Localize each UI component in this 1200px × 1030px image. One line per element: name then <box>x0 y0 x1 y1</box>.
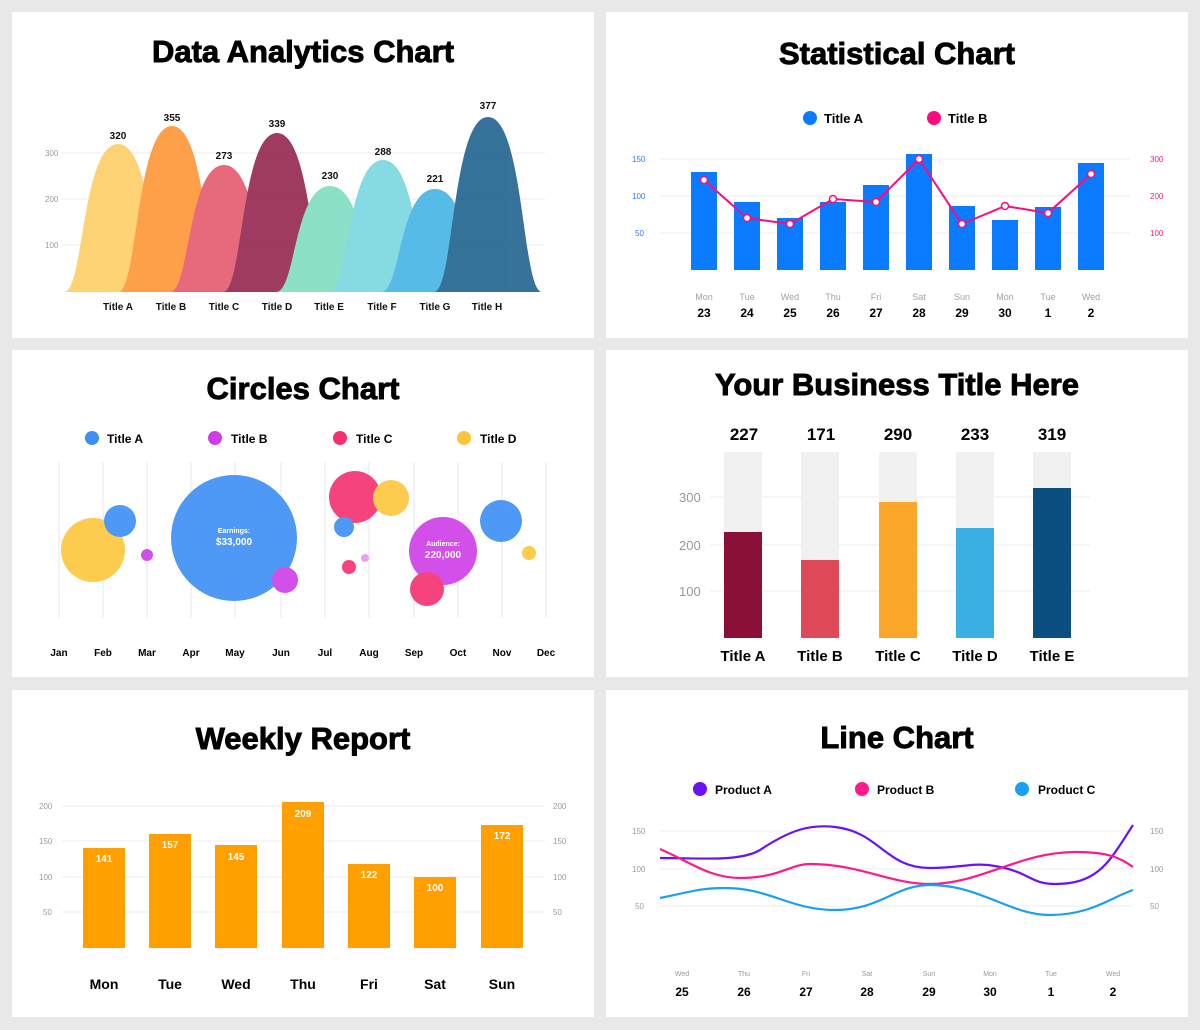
panel: weekly report: Sun <box>489 976 515 992</box>
panel: circles chart: Jan <box>50 648 68 659</box>
bar chart <box>83 802 523 948</box>
panel: weekly report: Tue <box>158 976 182 992</box>
panel: statistical chart: 2 <box>1088 306 1095 320</box>
panel: line chart: Mon <box>983 971 997 978</box>
legend <box>85 431 517 446</box>
legend: Product B <box>877 783 935 797</box>
legend: Product A <box>715 783 772 797</box>
panel: statistical chart: Fri <box>871 292 881 302</box>
panel: weekly report: 200 <box>39 802 53 811</box>
panel: line chart: 27 <box>799 985 813 999</box>
panel: line chart: Tue <box>1045 971 1057 978</box>
panel: circles chart: Mar <box>138 648 156 659</box>
panel: data analytics chart: Title D <box>262 302 292 313</box>
panel: statistical chart: Sat <box>912 292 926 302</box>
panel: statistical chart <box>606 12 1188 338</box>
panel: data analytics chart: 355 <box>164 113 181 124</box>
panel: weekly report: 100 <box>553 873 567 882</box>
panel: weekly report: Sat <box>424 976 446 992</box>
panel: weekly report: 122 <box>361 870 378 881</box>
panel: business bars: 300 <box>679 490 701 505</box>
legend: Title B <box>231 432 268 446</box>
panel: statistical chart: 29 <box>955 306 969 320</box>
panel: line chart <box>606 690 1188 1017</box>
title: weekly: Weekly Report <box>196 721 410 756</box>
lines <box>660 825 1133 915</box>
panel: data analytics chart: 377 <box>480 101 497 112</box>
title: business: Your Business Title Here <box>715 367 1079 402</box>
panel: statistical chart: Mon <box>996 292 1014 302</box>
panel: line chart: Fri <box>802 971 811 978</box>
panel: line chart: 29 <box>922 985 936 999</box>
panel: data analytics chart: 200 <box>45 195 59 204</box>
panel: circles chart: Apr <box>182 648 200 659</box>
panel: statistical chart: 150 <box>632 155 646 164</box>
panel: business bars: 171 <box>807 425 835 444</box>
panel: business bars: 233 <box>961 425 989 444</box>
panel: weekly report: 141 <box>96 854 113 865</box>
panel: line chart: 150 <box>1150 827 1164 836</box>
panel: weekly report: Wed <box>221 976 251 992</box>
panel: weekly report: 100 <box>427 883 444 894</box>
panel: line chart: 1 <box>1048 985 1055 999</box>
panel: business bars: Title A <box>720 648 766 665</box>
panel: line chart: 50 <box>1150 902 1159 911</box>
title: line chart: Line Chart <box>820 720 974 755</box>
panel: circles chart <box>12 350 594 677</box>
panel: statistical chart: 26 <box>826 306 840 320</box>
panel: statistical chart: Mon <box>695 292 713 302</box>
panel: weekly report: 50 <box>553 908 562 917</box>
panel: statistical chart: Wed <box>1082 292 1100 302</box>
panel: business bars: Title C <box>875 648 921 665</box>
panel: line chart: 28 <box>860 985 874 999</box>
legend: Title C <box>356 432 393 446</box>
panel: line chart: 30 <box>983 985 997 999</box>
panel: line chart: Thu <box>738 971 750 978</box>
panel: data analytics chart: Title E <box>314 302 344 313</box>
panel: weekly report: 150 <box>553 837 567 846</box>
panel: weekly report: 100 <box>39 873 53 882</box>
panel: circles chart: Jul <box>318 648 332 659</box>
panel: circles chart: Aug <box>359 648 379 659</box>
panel: data analytics chart: Title F <box>367 302 397 313</box>
panel: statistical chart: 24 <box>740 306 754 320</box>
panel: data analytics chart: 273 <box>216 151 233 162</box>
panel: circles chart: Jun <box>272 648 290 659</box>
bell chart <box>64 117 542 292</box>
panel: statistical chart: 1 <box>1045 306 1052 320</box>
legend: Title B <box>948 111 988 126</box>
legend: Title D <box>480 432 517 446</box>
panel: statistical chart: 25 <box>783 306 797 320</box>
panel: business bars: 227 <box>730 425 758 444</box>
panel: statistical chart: Sun <box>954 292 970 302</box>
panel: weekly report: Mon <box>90 976 118 992</box>
panel: line chart: Sun <box>923 971 935 978</box>
legend <box>693 782 1096 797</box>
panel: statistical chart: Thu <box>825 292 841 302</box>
panel: data analytics chart: Title B <box>156 302 186 313</box>
panel: data analytics chart: 230 <box>322 171 339 182</box>
panel: data analytics chart: Title G <box>420 302 451 313</box>
panel: business bars: 319 <box>1038 425 1066 444</box>
panel: line chart: 25 <box>675 985 689 999</box>
bar+line chart <box>691 154 1104 270</box>
panel: circles chart: Dec <box>537 648 556 659</box>
panel: statistical chart: 30 <box>998 306 1012 320</box>
panel: statistical chart: Tue <box>739 292 755 302</box>
title: circles: Circles Chart <box>207 371 399 406</box>
panel: statistical chart: 100 <box>632 192 646 201</box>
panel: weekly report: 150 <box>39 837 53 846</box>
panel: line chart: 2 <box>1110 985 1117 999</box>
panel: circles chart: Sep <box>405 648 423 659</box>
panel: business bars: Title B <box>797 648 843 665</box>
panel: data analytics chart: Title C <box>209 302 239 313</box>
panel: business bars <box>606 350 1188 677</box>
panel: line chart: 100 <box>632 865 646 874</box>
panel: business bars: Title E <box>1030 648 1074 665</box>
panel: statistical chart: Tue <box>1040 292 1056 302</box>
panel: line chart: 26 <box>737 985 751 999</box>
panel: business bars: Title D <box>952 648 998 665</box>
panel: circles chart: Earnings: <box>218 528 250 535</box>
legend: Product C <box>1038 783 1096 797</box>
panel: line chart: 100 <box>1150 865 1164 874</box>
bubbles <box>61 471 536 606</box>
panel: weekly report: 145 <box>228 852 245 863</box>
stacked bars <box>724 452 1071 638</box>
panel: data analytics chart: 100 <box>45 241 59 250</box>
panel: line chart: 50 <box>635 902 644 911</box>
panel: data analytics chart: 339 <box>269 119 286 130</box>
panel: weekly report: Fri <box>360 976 378 992</box>
panel: circles chart: Oct <box>450 648 467 659</box>
legend: Title A <box>107 432 143 446</box>
title: data analytics: Data Analytics Chart <box>152 34 454 69</box>
panel: circles chart: Nov <box>493 648 512 659</box>
panel: weekly report: 157 <box>162 840 179 851</box>
legend: Title A <box>824 111 864 126</box>
panel: statistical chart: 50 <box>635 229 644 238</box>
panel: statistical chart: 300 <box>1150 155 1164 164</box>
panel: statistical chart: 200 <box>1150 192 1164 201</box>
legend <box>803 111 988 126</box>
panel: data analytics chart: 300 <box>45 149 59 158</box>
panel: line chart: 150 <box>632 827 646 836</box>
panel: weekly report: 50 <box>43 908 52 917</box>
panel: weekly report: Thu <box>290 976 316 992</box>
panel: weekly report: 209 <box>295 809 312 820</box>
panel: circles chart: May <box>225 648 245 659</box>
panel: weekly report: 200 <box>553 802 567 811</box>
panel: statistical chart: 27 <box>869 306 883 320</box>
panel: line chart: Sat <box>862 971 872 978</box>
panel: business bars: 200 <box>679 538 701 553</box>
panel: data analytics chart: Title H <box>472 302 502 313</box>
panel: business bars: 100 <box>679 584 701 599</box>
panel: statistical chart: 28 <box>912 306 926 320</box>
panel: statistical chart: Wed <box>781 292 799 302</box>
panel: line chart: Wed <box>1106 971 1120 978</box>
panel: data analytics chart: 288 <box>375 147 392 158</box>
panel: data analytics chart <box>12 12 594 338</box>
panel: data analytics chart: 221 <box>427 174 444 185</box>
panel: circles chart: Feb <box>94 648 112 659</box>
panel: data analytics chart: Title A <box>103 302 133 313</box>
panel: weekly report <box>12 690 594 1017</box>
panel: statistical chart: 23 <box>697 306 711 320</box>
panel: business bars: 290 <box>884 425 912 444</box>
panel: circles chart: $33,000 <box>216 537 253 548</box>
panel: data analytics chart: 320 <box>110 131 127 142</box>
panel: line chart: Wed <box>675 971 689 978</box>
panel: circles chart: 220,000 <box>425 550 462 561</box>
panel: weekly report: 172 <box>494 831 511 842</box>
title: statistical: Statistical Chart <box>779 36 1015 71</box>
panel: circles chart: Audience: <box>426 541 460 548</box>
panel: statistical chart: 100 <box>1150 229 1164 238</box>
